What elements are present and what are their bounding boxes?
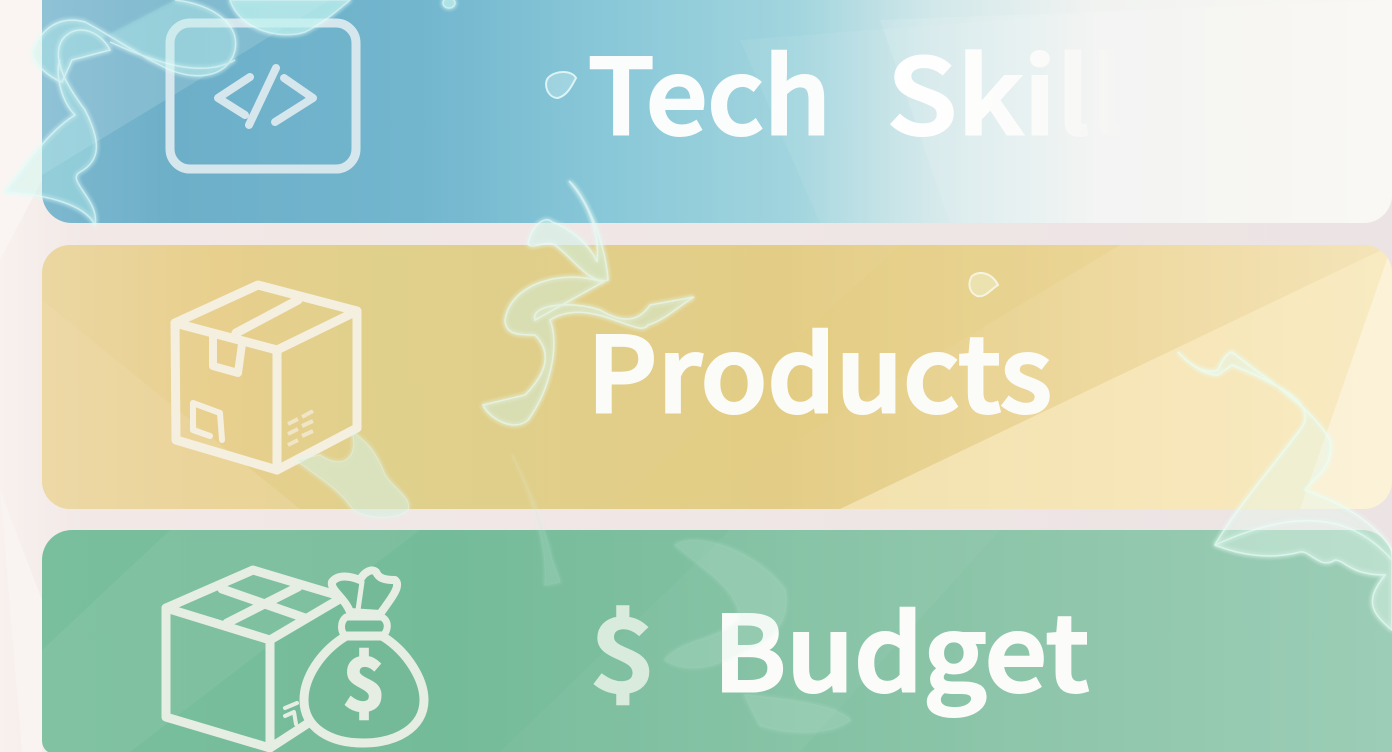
smoke wisp: right xyxy=(1178,352,1392,630)
heading: tech skill: Tech xyxy=(588,13,831,164)
icon: box with money bag xyxy=(166,570,424,748)
icon: cardboard box xyxy=(175,285,357,470)
icon: code window xyxy=(170,23,356,169)
heading: budget: Budget xyxy=(713,570,1089,721)
smoke wisp: centre xyxy=(483,181,694,425)
icon: dollar on bag: $ xyxy=(343,626,385,731)
smoke wisp: top left xyxy=(5,0,455,225)
smoke wisp: lower centre xyxy=(512,455,850,732)
smoke droplet: yellow panel xyxy=(969,273,998,296)
heading: products: Products xyxy=(587,291,1052,442)
heading: tech skill xyxy=(588,13,1125,164)
heading: tech skill: Skill xyxy=(887,13,1125,164)
panel: budget xyxy=(42,530,1392,752)
panel: products xyxy=(42,245,1392,509)
heading: budget: $ xyxy=(590,575,655,720)
smoke wisp: under box xyxy=(296,432,409,517)
smoke droplet: top panel right of icon xyxy=(546,72,576,98)
panel: tech skill xyxy=(42,0,1392,223)
